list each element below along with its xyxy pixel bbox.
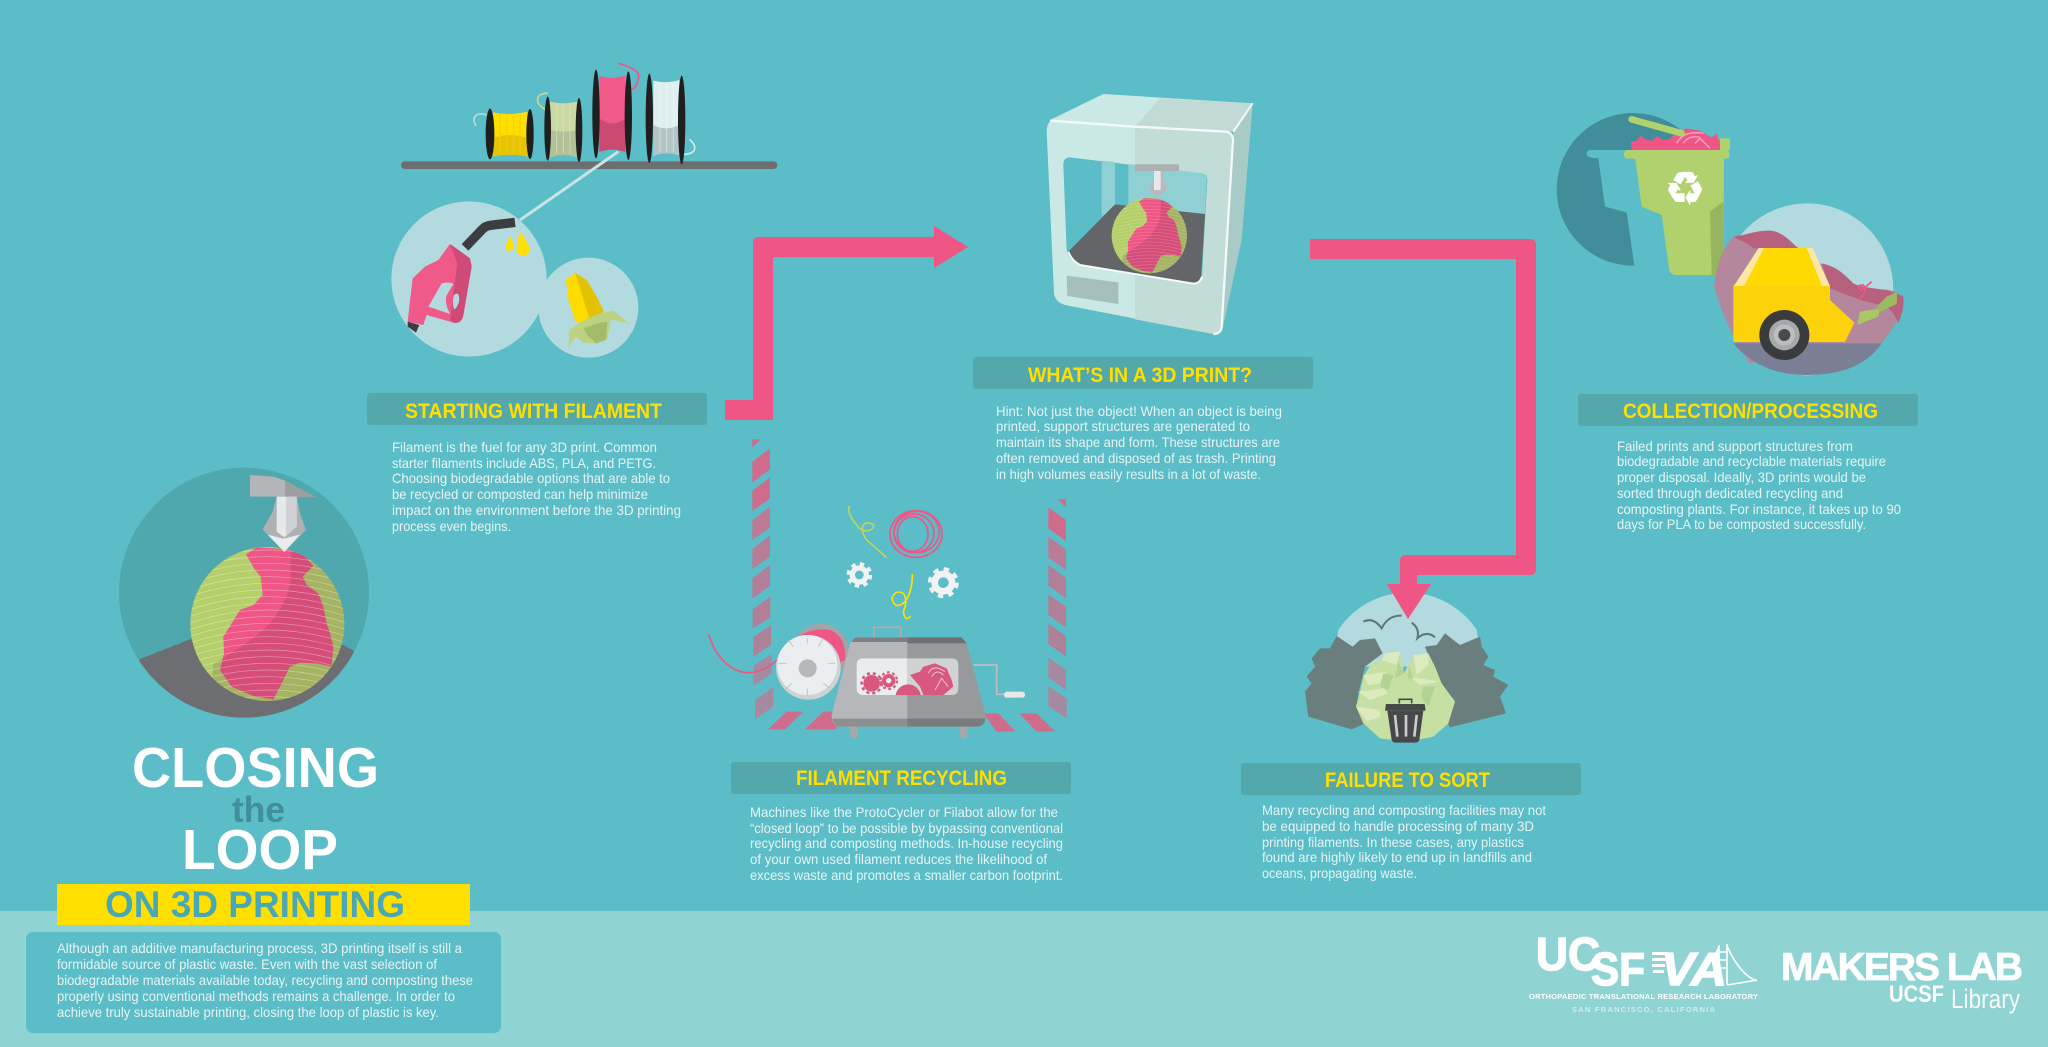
intro panel: achieve truly sustainable printing, closing the loop of plastic is key.	[57, 1004, 439, 1020]
icon: corn	[566, 273, 629, 347]
recycled spool	[708, 624, 849, 700]
body text: Many recycling and composting facilities may not	[1262, 802, 1546, 818]
body text: printed, support structures are generated to	[996, 418, 1250, 434]
circle: corn background	[538, 258, 638, 358]
body text: recycling and composting methods. In-house recycling	[750, 835, 1063, 851]
body text: starter filaments include ABS, PLA, and PETG.	[392, 455, 656, 471]
icon: fuel drops	[506, 232, 530, 256]
logo: Makers Lab UCSF Library	[1781, 946, 2023, 1014]
body text	[1617, 438, 1901, 532]
body text: oceans, propagating waste.	[1262, 865, 1417, 881]
shelf	[401, 161, 777, 169]
circle: pump nozzle background	[391, 201, 547, 357]
title: closing: CLOSING	[132, 736, 379, 800]
body text: in high volumes easily results in a lot of waste.	[996, 466, 1261, 482]
spool: white	[646, 74, 695, 164]
heading band	[1578, 394, 1918, 426]
birds	[1363, 616, 1435, 638]
body text: be equipped to handle processing of many 3D	[1262, 818, 1534, 834]
icon: fuel nozzle	[408, 222, 515, 333]
body text: Hint: Not just the object! When an object is being	[996, 403, 1282, 419]
leaves and squiggle	[1857, 282, 1897, 325]
body text: days for PLA to be composted successfully.	[1617, 516, 1866, 532]
build plate	[140, 639, 354, 718]
golden gate bridge mark	[1700, 944, 1757, 985]
printer control panel	[1067, 276, 1118, 304]
illustration: filament spools and nozzle	[391, 63, 777, 358]
filament squiggle: yellow	[892, 574, 912, 619]
section: collection/processing	[1578, 394, 1918, 532]
hazard stripes: left	[752, 439, 773, 719]
title: the: the	[232, 789, 285, 830]
heading band: FILAMENT RECYCLING	[796, 767, 1007, 790]
gear: small	[848, 564, 870, 586]
printer top face	[1050, 94, 1253, 132]
title: loop: LOOP	[182, 818, 338, 882]
section: failure to sort	[1241, 763, 1581, 881]
print head	[250, 475, 317, 552]
illustration: filament recycling	[708, 439, 1067, 738]
body text: be recycled or composted can help minimize	[392, 486, 648, 502]
spool: pink	[592, 63, 639, 160]
printer window	[1063, 157, 1207, 284]
bin lid handle	[1632, 119, 1682, 133]
intro panel	[26, 932, 501, 1033]
bin trash pile	[1631, 128, 1729, 150]
hero circle illustration: printed globe	[119, 468, 369, 720]
body text: of your own used filament reduces the likelihood of	[750, 851, 1047, 867]
arrow: 3D print to failure to sort	[1310, 239, 1536, 619]
body text: often removed and disposed of as trash. Printing	[996, 450, 1276, 466]
body text	[750, 804, 1063, 883]
body text: sorted through dedicated recycling and	[1617, 485, 1843, 501]
body text: process even begins.	[392, 518, 511, 534]
body text: Choosing biodegradable options that are able to	[392, 470, 670, 486]
spool: yellow	[474, 109, 534, 159]
logo: UCSF VA: SAN FRANCISCO, CALIFORNIA	[1572, 1005, 1716, 1014]
hazard stripes: right	[1048, 499, 1067, 718]
bin shadow circle	[1557, 113, 1687, 266]
truck scene circle	[1721, 203, 1893, 375]
title	[132, 736, 379, 882]
body text: excess waste and promotes a smaller carbon footprint.	[750, 867, 1063, 883]
logo: UCSF VA: ORTHOPAEDIC TRANSLATIONAL RESEARCH LABORATORY	[1529, 992, 1758, 1001]
body text: printing filaments. In these cases, any plastics	[1262, 834, 1524, 850]
heading band: WHAT’S IN A 3D PRINT?	[1028, 364, 1252, 387]
recycling machine	[832, 627, 1025, 738]
icon: trash can	[1385, 699, 1426, 743]
illustration: failure to sort	[1305, 593, 1508, 743]
body text: Failed prints and support structures from	[1617, 438, 1853, 454]
filament coil: pink	[890, 511, 942, 557]
body text: proper disposal. Ideally, 3D prints would be	[1617, 469, 1866, 485]
filament line from spool to nozzle	[520, 152, 618, 220]
logo: UCSF VA: SF	[1591, 943, 1645, 995]
body text: Filament is the fuel for any 3D print. Common	[392, 439, 657, 455]
printed globe	[183, 547, 353, 712]
section: what's in a 3D print	[973, 357, 1313, 482]
truck	[1733, 248, 1854, 360]
compost hill	[1714, 231, 1904, 363]
logo: UCSF VA: UC	[1536, 928, 1600, 980]
section: starting with filament	[367, 393, 707, 534]
logo: UCSF VA: VA	[1661, 943, 1727, 995]
printer front face	[1047, 120, 1232, 334]
heading band	[367, 393, 707, 425]
logo: Makers Lab UCSF Library: MAKERS LAB	[1781, 946, 2023, 989]
recycling bin	[1624, 150, 1729, 275]
intro panel: Although an additive manufacturing process, 3D printing itself is still a	[57, 940, 462, 956]
heading band: FAILURE TO SORT	[1325, 769, 1490, 792]
title banner: ON 3D PRINTING	[105, 884, 405, 925]
body text: composting plants. For instance, it takes up to 90	[1617, 501, 1901, 517]
arrow: filament to 3D print	[725, 226, 968, 420]
truck wheel	[1759, 310, 1809, 360]
heading band	[1241, 763, 1581, 795]
body text: Machines like the ProtoCycler or Filabot allow for the	[750, 804, 1058, 820]
ground	[1733, 343, 1882, 375]
crumpled green paper pile	[1356, 652, 1455, 742]
printer nozzle	[1135, 164, 1179, 198]
sky circle	[1335, 593, 1480, 650]
printed globe	[1108, 198, 1191, 279]
intro panel: biodegradable materials available today, recycling and composting these	[57, 972, 473, 988]
body text	[392, 439, 681, 534]
gear: large	[930, 569, 957, 596]
intro panel: properly using conventional methods remains a challenge. In order to	[57, 988, 455, 1004]
body text	[1262, 802, 1546, 881]
body text: found are highly likely to end up in landfills and	[1262, 849, 1532, 865]
heading band	[731, 762, 1071, 794]
logo: UCSF VA	[1529, 928, 1758, 1014]
heading band	[973, 357, 1313, 389]
section: filament recycling	[731, 762, 1071, 883]
icon: recycle symbol: ♻	[1665, 162, 1705, 215]
body text: impact on the environment before the 3D printing	[392, 502, 681, 518]
body text	[996, 403, 1282, 482]
illustration: 3D printer	[1047, 94, 1253, 334]
illustration: collection bin and truck	[1557, 113, 1904, 375]
logo: Makers Lab UCSF Library: Library	[1951, 984, 2020, 1014]
heading band: STARTING WITH FILAMENT	[405, 400, 662, 423]
body text: biodegradable and recyclable materials require	[1617, 453, 1886, 469]
intro panel: formidable source of plastic waste. Even with the vast selection of	[57, 956, 437, 972]
footer band	[0, 911, 2048, 1047]
logo: Makers Lab UCSF Library: UCSF	[1889, 981, 1944, 1008]
heading band: COLLECTION/PROCESSING	[1623, 400, 1878, 423]
printer side face	[1222, 103, 1253, 333]
spool: green	[537, 93, 582, 162]
body text: “closed loop” to be possible by bypassing conventional	[750, 820, 1063, 836]
hazard stripes: bottom	[768, 712, 1055, 732]
filament squiggle: green	[849, 506, 887, 558]
machine window	[857, 658, 958, 695]
body text: maintain its shape and form. These structures are	[996, 434, 1280, 450]
dark waste mounds	[1305, 633, 1508, 729]
